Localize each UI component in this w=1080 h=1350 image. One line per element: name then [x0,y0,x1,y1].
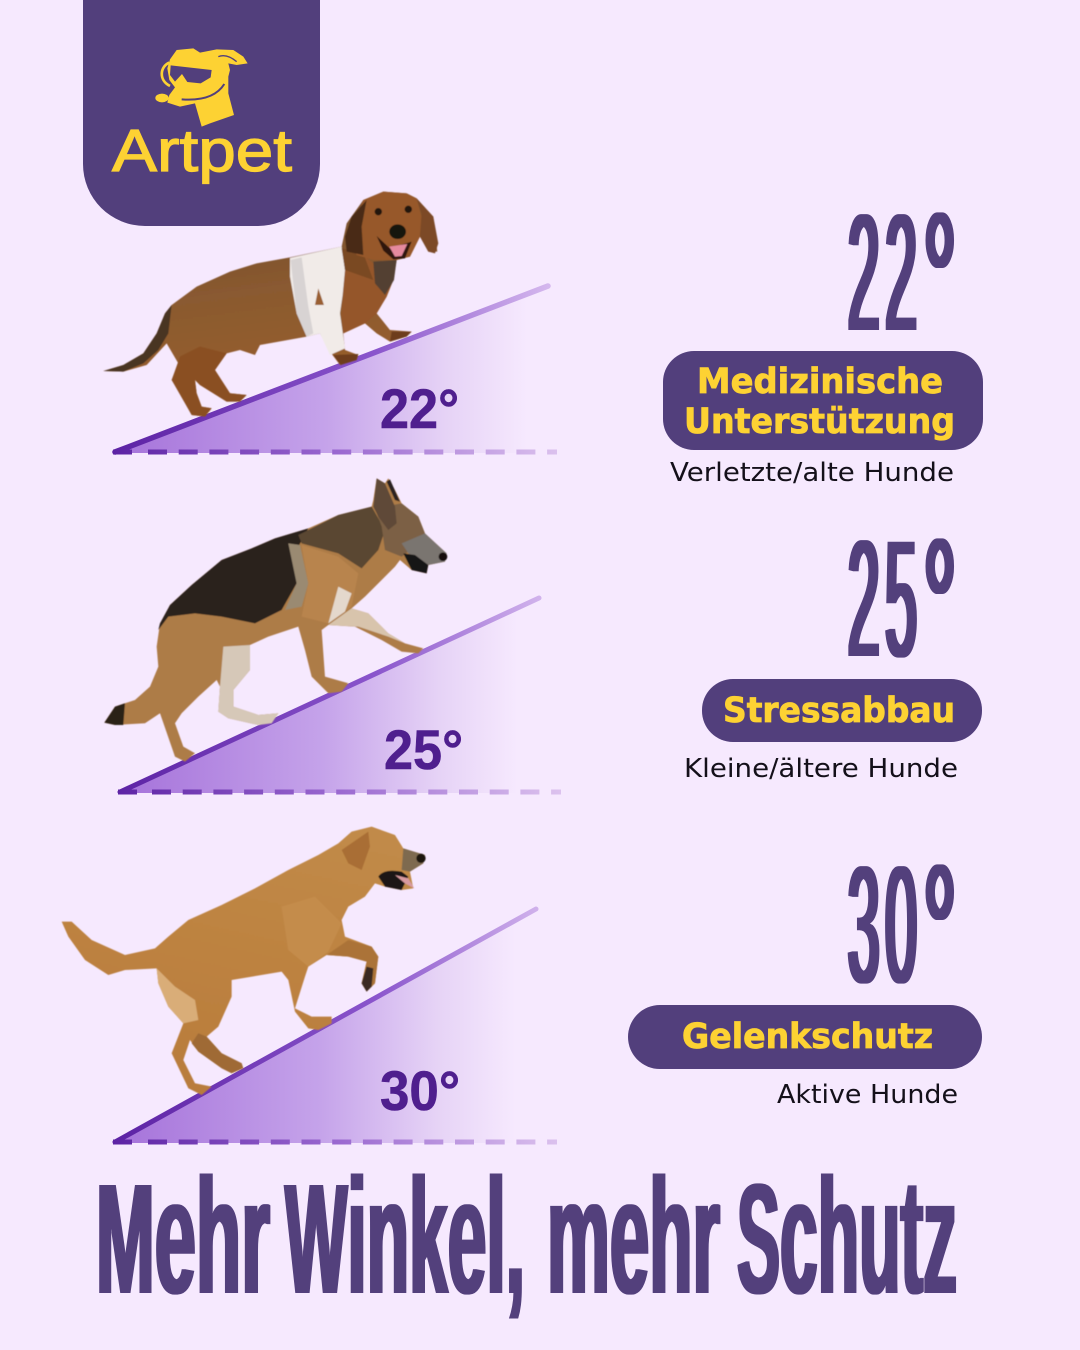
ear [373,478,397,530]
logo wordmark: Artpet [112,118,292,184]
pill label: Stressabbau [723,691,955,731]
dog: german shepherd [104,478,447,762]
left ear [345,200,367,255]
angle label: 30° [380,1059,460,1122]
back ear [387,479,400,502]
digits: 25 [848,507,917,692]
angle label: 22° [380,377,459,440]
ramp 30 degrees [113,909,557,1143]
icon: dog with sunglasses [155,48,248,127]
muzzle shade [402,848,425,872]
silhouette [62,827,425,1095]
headline: Winkel, [285,1144,525,1328]
white chest [328,587,352,623]
ramp edge [115,286,548,452]
ramp 25 degrees [118,598,561,793]
ear [342,832,370,870]
bandage [290,247,345,355]
audience: active dogs: Aktive Hunde [777,1080,958,1110]
mouth [403,553,428,573]
big number 22 degrees [848,171,957,395]
big number 30 degrees [848,823,957,1047]
headline: Mehr [96,1144,270,1328]
tail tip [104,703,125,725]
digits: 22 [848,181,917,366]
pill label line one: Medizinische [697,362,943,402]
degree sign: ° [923,171,957,395]
bandage gap [315,288,324,305]
headline: mehr [547,1144,720,1328]
pill: Stressabbau [702,679,982,742]
pill: Gelenkschutz [628,1005,982,1069]
raised leg shade [327,940,378,992]
tongue [389,244,407,257]
right ear [417,198,438,253]
dashed base line [113,450,557,454]
ramp surface [113,289,540,453]
head [375,503,425,557]
pill: Medizinische Unterstützung [663,351,983,450]
dog: golden retriever [62,827,426,1095]
rear leg pale [218,645,278,725]
tongue [395,875,414,888]
grey shoulder stripe [285,543,308,610]
digits: 30 [848,833,917,1018]
angle label: 25° [384,718,463,781]
degree sign: ° [923,497,957,721]
audience: small or older dogs: Kleine/ältere Hunde [684,754,958,784]
shoulder shade [282,897,342,967]
dashed base line [118,790,561,794]
mouth [378,871,408,890]
neck shade [342,248,373,280]
pill label: Gelenkschutz [682,1017,933,1057]
muzzle [402,533,447,565]
audience: injured or old dogs: Verletzte/alte Hunde [670,458,954,488]
nose [389,224,406,239]
pill background [628,1005,982,1069]
dashed base line [113,1140,557,1144]
dark neck [298,507,385,568]
silhouette [104,478,447,762]
mouth [377,236,412,259]
dog: dachshund [103,192,438,417]
silhouette [103,192,437,417]
ramp surface [113,914,528,1143]
front leg pale [328,608,405,643]
hind legs [172,347,247,417]
logo badge [83,0,320,226]
chest dark patch [373,260,397,295]
head [348,192,422,260]
eyes [375,206,412,215]
ramp edge [120,598,539,792]
chest [302,545,358,623]
ramp edge [115,909,536,1142]
pill background [663,351,983,450]
chest front [342,255,393,333]
nose [416,854,426,863]
belly highlight [157,968,198,1023]
raised paw pads [362,967,373,992]
badge shape [83,0,320,226]
degree sign: ° [923,823,957,1047]
pill background [702,679,982,742]
black saddle [158,528,308,630]
ramp surface [118,603,530,793]
big number 25 degrees [848,497,957,721]
paws [333,332,412,365]
ramp 22 degrees [113,286,557,453]
pill label line two: Unterstützung [684,402,955,442]
far hind leg shade [192,1033,243,1073]
nose [439,552,447,561]
tail dark [103,305,172,372]
headline [96,1144,957,1328]
bandage shadow [291,257,313,337]
